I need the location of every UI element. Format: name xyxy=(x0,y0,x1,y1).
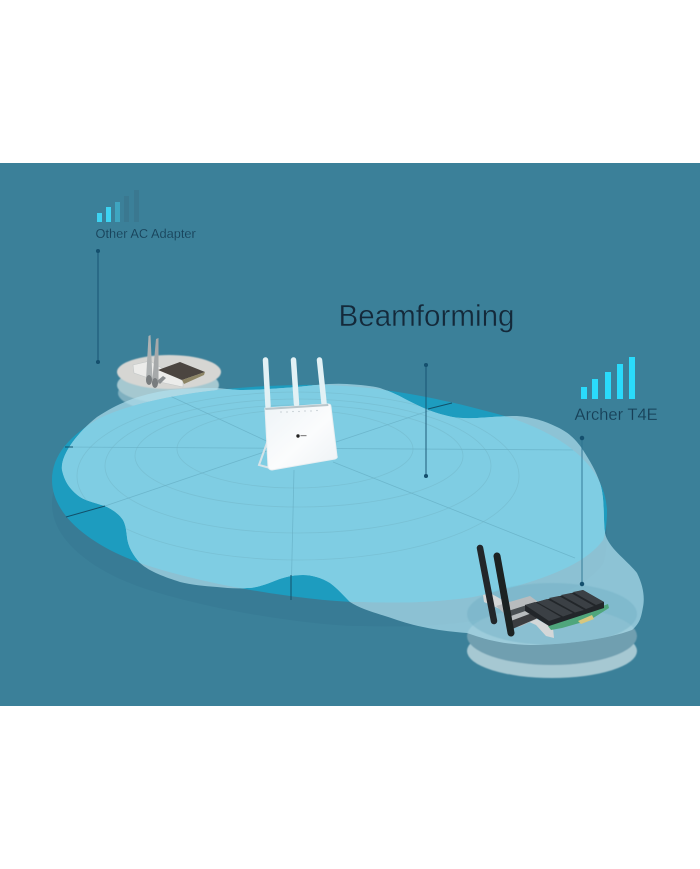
router xyxy=(259,360,337,470)
leader lines xyxy=(96,249,584,586)
background panel xyxy=(0,163,700,706)
infographic: Beamforming comparison xyxy=(0,163,700,706)
dark spokes on exposed disc xyxy=(65,403,452,600)
beam coverage blob xyxy=(62,384,644,645)
router logo xyxy=(296,434,306,438)
Archer T4E card xyxy=(480,548,609,638)
T4E pad top xyxy=(467,583,637,645)
disc spokes on coverage xyxy=(73,396,575,576)
signal bars: other adapter xyxy=(97,190,139,222)
router body xyxy=(265,404,337,470)
router antennas xyxy=(266,360,324,406)
pad stack: other adapter xyxy=(117,355,221,411)
pad stack: Archer T4E xyxy=(467,607,637,678)
beam coverage over disc xyxy=(52,385,637,645)
antenna 1 xyxy=(480,548,494,621)
radio rings xyxy=(77,392,519,560)
antenna 2 xyxy=(497,556,511,633)
label: Archer T4E: Archer T4E xyxy=(574,406,658,424)
router stand xyxy=(259,440,270,468)
heatsink xyxy=(525,590,604,626)
signal bars: Archer T4E xyxy=(581,357,635,399)
label: other adapter: Other AC Adapter xyxy=(96,226,197,241)
coverage disc xyxy=(52,385,607,602)
heading: Beamforming xyxy=(338,298,514,333)
circuit board xyxy=(548,604,609,630)
coverage disc shadow xyxy=(52,409,607,626)
bracket xyxy=(483,593,554,638)
other adapter device xyxy=(133,335,205,388)
